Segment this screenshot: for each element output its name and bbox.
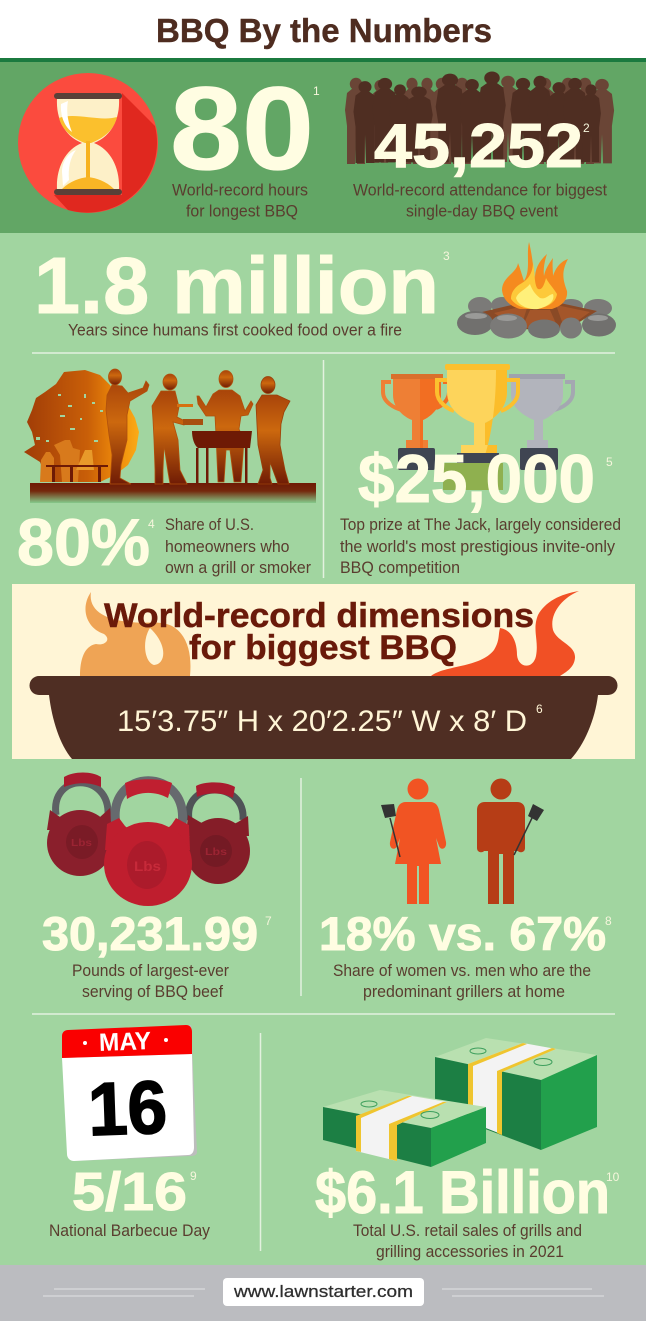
stat: 5/16 xyxy=(49,1162,211,1240)
stat: 80 hours: 80 xyxy=(170,63,314,195)
icon: hourglass xyxy=(18,73,158,213)
kettlebell: left: Lbs xyxy=(71,838,93,849)
tree light specks xyxy=(36,394,103,442)
icon: orange flame xyxy=(80,592,190,676)
icon: man griller xyxy=(477,778,544,904)
stat: $25,000 prize: $25,000 xyxy=(358,441,595,517)
stat: 80% homeowners xyxy=(17,505,311,579)
icon: woman griller xyxy=(381,778,446,904)
stat: 80% homeowners: Share of U.S. xyxy=(165,516,254,534)
stat: 5/16: 9 xyxy=(190,1169,197,1183)
heading: for biggest BBQ xyxy=(189,629,457,667)
stat: 18% vs. 67%: 8 xyxy=(605,914,612,928)
title: BBQ By the Numbers xyxy=(156,12,492,49)
picnic group xyxy=(40,440,108,482)
stat: 80% homeowners: 80% xyxy=(17,505,150,579)
scene: backyard grilling silhouettes xyxy=(24,369,316,503)
kettlebell: right: Lbs xyxy=(205,847,228,858)
icon: campfire xyxy=(457,242,616,338)
icon: trophies xyxy=(383,364,573,490)
trophy: bronze xyxy=(383,374,449,470)
icon: calendar xyxy=(62,1025,197,1161)
stat: 80 hours: World-record hours xyxy=(172,182,308,200)
tree xyxy=(24,370,139,482)
panel: top record band xyxy=(0,58,646,233)
stat: 18% vs. 67% xyxy=(319,907,612,1001)
stat: $25,000 prize: BBQ competition xyxy=(340,559,460,577)
person 3 xyxy=(197,370,253,482)
stat: 80% homeowners: 4 xyxy=(148,517,155,531)
icon: money stacks xyxy=(323,1038,597,1167)
trophy: silver xyxy=(509,374,573,470)
stat: 80% homeowners: own a grill or smoker xyxy=(165,559,311,577)
stat: $6.1 Billion xyxy=(315,1159,620,1261)
stat: $25,000 prize xyxy=(340,441,621,577)
stat: $25,000 prize: 5 xyxy=(606,455,613,469)
dimensions text: 15′3.75″ H x 20′2.25″ W x 8′ D xyxy=(117,705,527,738)
plate and ribs xyxy=(177,404,203,425)
stat: 18% vs. 67%: 18% vs. 67% xyxy=(319,907,606,960)
icon: crowd silhouette xyxy=(345,71,614,164)
icon: kettlebells xyxy=(47,772,250,906)
panel: world-record dimensions xyxy=(12,584,635,759)
stat: $25,000 prize: the world's most prestigious invite-only xyxy=(340,538,616,556)
stat: 30,231.99 pounds: Pounds of largest-ever xyxy=(72,962,229,980)
icon: barbecue pan xyxy=(30,676,618,759)
icon: calendar: 16 xyxy=(87,1065,168,1151)
dimensions text: 6 xyxy=(536,702,543,716)
stat: 80 hours: for longest BBQ xyxy=(186,202,298,220)
heading xyxy=(104,597,534,667)
stat: 5/16: 5/16 xyxy=(72,1162,187,1222)
stat: 30,231.99 pounds: serving of BBQ beef xyxy=(82,983,223,1001)
big stack xyxy=(435,1038,597,1150)
stat: 18% vs. 67%: Share of women vs. men who are the xyxy=(333,962,591,980)
stat: 30,231.99 pounds xyxy=(42,907,272,1001)
footer: www.lawnstarter.com xyxy=(233,1282,413,1301)
stat: 45,252 attendance: 45,252 xyxy=(374,112,583,181)
person 1 xyxy=(106,369,149,484)
kettlebell: center xyxy=(104,779,192,906)
stat: 1.8 million years: 3 xyxy=(443,249,450,263)
stat: 45,252 attendance: single-day BBQ event xyxy=(406,202,558,220)
stat: 80% homeowners: homeowners who xyxy=(165,538,290,556)
stat: 45,252 attendance xyxy=(353,112,607,220)
grill xyxy=(192,431,252,483)
small stack xyxy=(323,1090,486,1167)
kettlebell: left xyxy=(47,772,113,876)
stat: 5/16: National Barbecue Day xyxy=(49,1222,211,1240)
kettlebell: center: Lbs xyxy=(134,858,161,874)
footer xyxy=(0,1265,646,1321)
stat: $6.1 Billion: Total U.S. retail sales of grills and xyxy=(353,1222,582,1240)
money under trophy xyxy=(443,463,503,490)
spatula xyxy=(381,804,400,857)
stat: $6.1 Billion: grilling accessories in 2021 xyxy=(376,1243,564,1261)
kettlebell: right xyxy=(186,782,250,884)
stat: $6.1 Billion: 10 xyxy=(606,1170,620,1184)
stat: 45,252 attendance: World-record attendance for biggest xyxy=(353,182,607,200)
person 2 xyxy=(152,374,187,484)
stat: $6.1 Billion: $6.1 Billion xyxy=(315,1159,610,1226)
stat: 30,231.99 pounds: 7 xyxy=(265,914,272,928)
icon: red flame xyxy=(431,591,579,676)
stat: 18% vs. 67%: predominant grillers at home xyxy=(363,983,565,1001)
icon: calendar: MAY xyxy=(99,1027,152,1057)
person 4 xyxy=(256,376,290,484)
trophy: gold xyxy=(437,364,518,470)
stat: 30,231.99 pounds: 30,231.99 xyxy=(42,907,258,960)
spatula xyxy=(514,804,544,855)
stat: $25,000 prize: Top prize at The Jack, largely considered xyxy=(340,516,621,534)
ground xyxy=(30,483,316,503)
stat: 45,252 attendance: 2 xyxy=(583,121,590,135)
heading: World-record dimensions xyxy=(104,597,534,635)
stat: 1.8 million years: 1.8 million xyxy=(34,241,439,330)
stat: 1.8 million years: Years since humans first cooked food over a fire xyxy=(68,322,402,340)
stat: 80 hours: 1 xyxy=(313,84,320,98)
